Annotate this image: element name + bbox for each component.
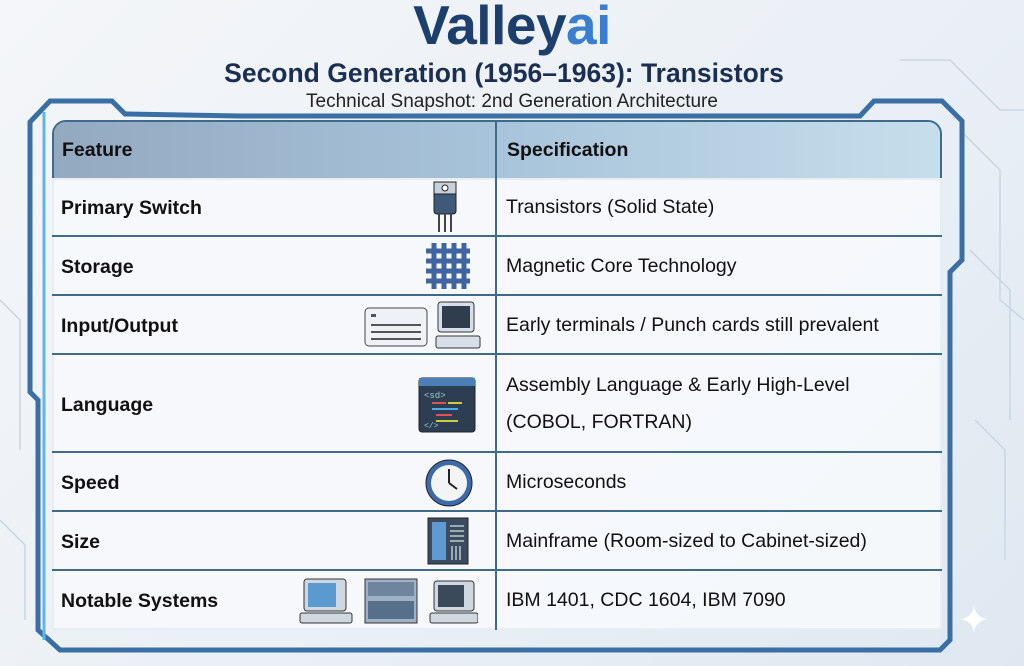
row: speed: Speed (61, 472, 120, 494)
row: size (52, 512, 942, 571)
row: notable systems (52, 571, 942, 630)
row: storage (52, 237, 942, 296)
row: io: Input/Output (61, 315, 178, 337)
row: size: Mainframe (Room-sized to Cabinet-sized) (506, 530, 867, 552)
icon: three systems (300, 578, 478, 624)
row: language: Language (61, 394, 153, 416)
table header: Specification (507, 139, 628, 161)
icon: transistor (434, 182, 456, 232)
icon: mainframe (428, 518, 468, 564)
row: io (52, 296, 942, 355)
row: storage: Magnetic Core Technology (506, 255, 737, 277)
row: primary switch: Primary Switch (61, 197, 202, 219)
row: io: Early terminals / Punch cards still prevalent (506, 314, 879, 336)
row: notable systems: IBM 1401, CDC 1604, IBM 7090 (506, 589, 786, 611)
row: language (52, 355, 942, 453)
icon: clock (426, 460, 472, 506)
row: primary switch: Transistors (Solid State) (506, 196, 714, 218)
row: language: (COBOL, FORTRAN) (506, 411, 692, 433)
row: speed (52, 453, 942, 512)
icon: code window: </> (424, 422, 439, 431)
icon: code window (418, 378, 476, 432)
icon: code window: <sd> (424, 391, 446, 401)
column divider (495, 120, 497, 630)
row: language: Assembly Language & Early High-Level (506, 374, 850, 396)
caption: Technical Snapshot: 2nd Generation Architecture (306, 91, 718, 112)
icon: core grid (426, 243, 470, 289)
row: notable systems: Notable Systems (61, 590, 218, 612)
table header: Feature (62, 139, 132, 161)
table (52, 120, 942, 630)
row: speed: Microseconds (506, 471, 626, 493)
row: storage: Storage (61, 256, 134, 278)
table header (54, 122, 944, 180)
icon: sparkle: ✦ (958, 600, 990, 642)
row: primary switch (52, 178, 942, 237)
icon: card and terminal (364, 302, 480, 348)
row: size: Size (61, 531, 100, 553)
subtitle: Second Generation (1956–1963): Transistors (224, 58, 784, 88)
